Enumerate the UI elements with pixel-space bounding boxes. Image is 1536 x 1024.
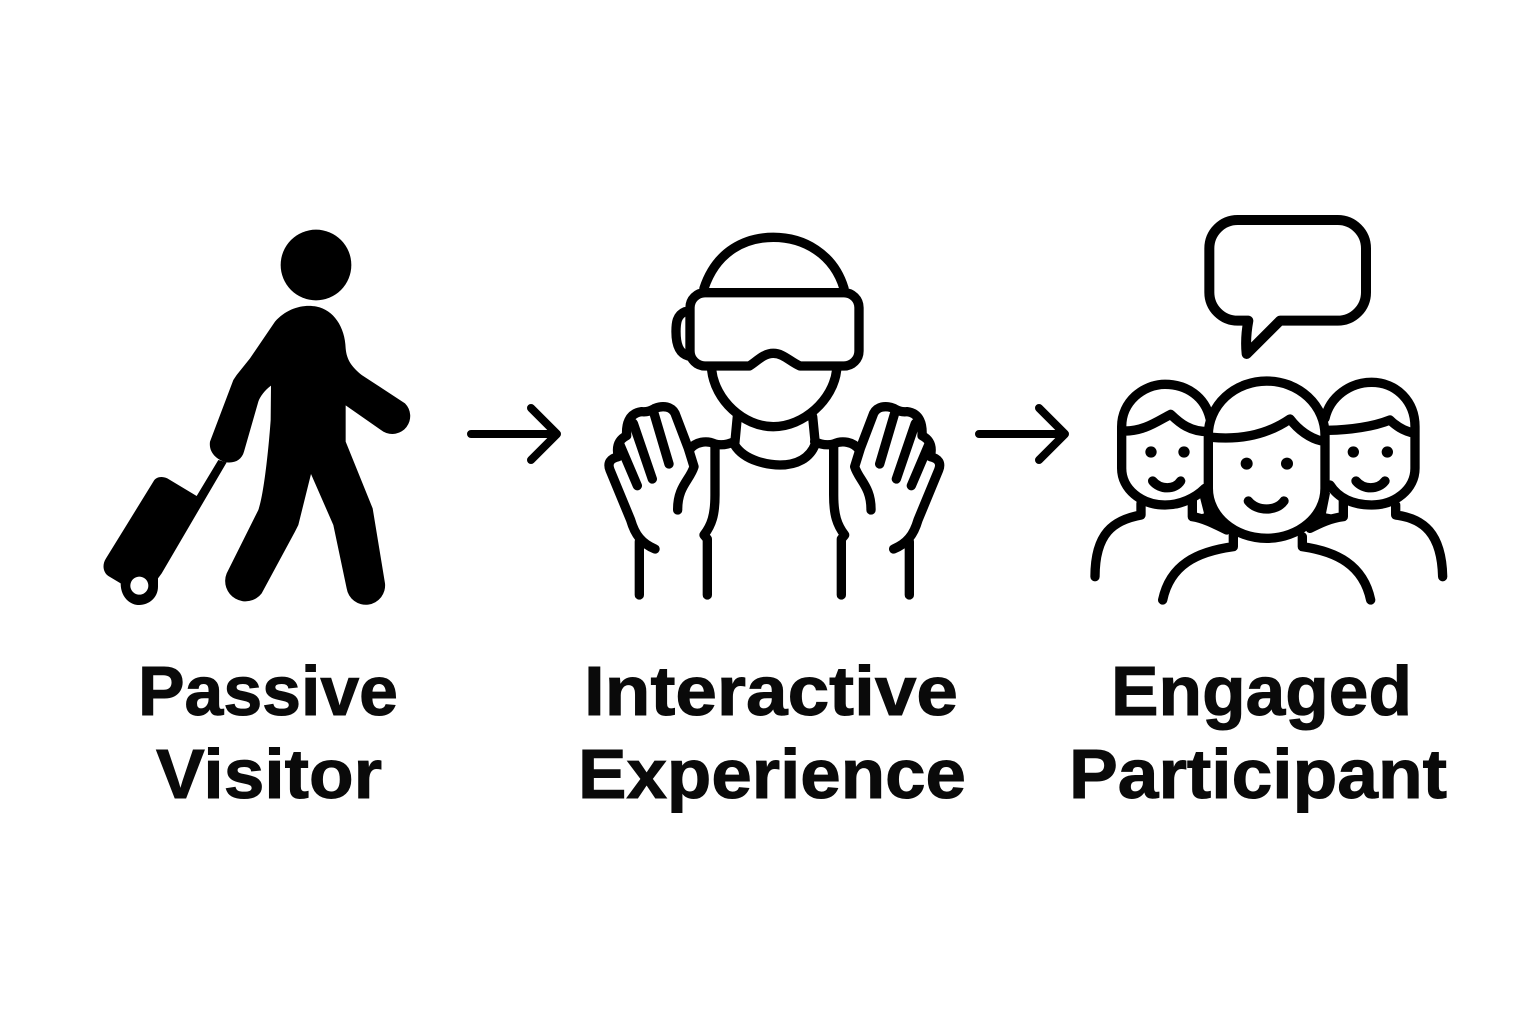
suitcase bbox=[104, 460, 227, 605]
label: Passive Visitor: Passive bbox=[138, 652, 398, 730]
left person bbox=[1095, 384, 1230, 577]
label: Interactive Experience: Interactive bbox=[584, 652, 958, 730]
label: Interactive Experience bbox=[578, 652, 966, 813]
goggles bbox=[690, 293, 859, 366]
label: Passive Visitor bbox=[138, 652, 398, 813]
helmet dome bbox=[704, 237, 844, 288]
ear piece bbox=[676, 312, 688, 356]
face and neck bbox=[712, 370, 837, 465]
centre person bbox=[1163, 381, 1371, 600]
label: Passive Visitor: Visitor bbox=[156, 735, 382, 813]
label: Engaged Participant bbox=[1069, 652, 1447, 813]
icon: person wearing VR headset with raised hands bbox=[609, 237, 940, 595]
arrow: experience to participant bbox=[979, 408, 1065, 460]
label: Interactive Experience: Experience bbox=[578, 735, 966, 813]
label: Engaged Participant: Participant bbox=[1069, 735, 1447, 813]
head and headset bbox=[676, 237, 859, 465]
icon: group of three people with speech bubble bbox=[1095, 220, 1443, 600]
speech bubble bbox=[1209, 220, 1366, 354]
label: Engaged Participant: Engaged bbox=[1111, 652, 1412, 730]
left arm and hand bbox=[609, 407, 734, 595]
right person bbox=[1307, 382, 1443, 577]
icon: walking visitor with suitcase bbox=[104, 230, 410, 605]
head bbox=[281, 230, 351, 300]
body bbox=[210, 306, 410, 605]
arrow: visitor to experience bbox=[471, 408, 557, 460]
right arm and hand bbox=[815, 407, 940, 595]
